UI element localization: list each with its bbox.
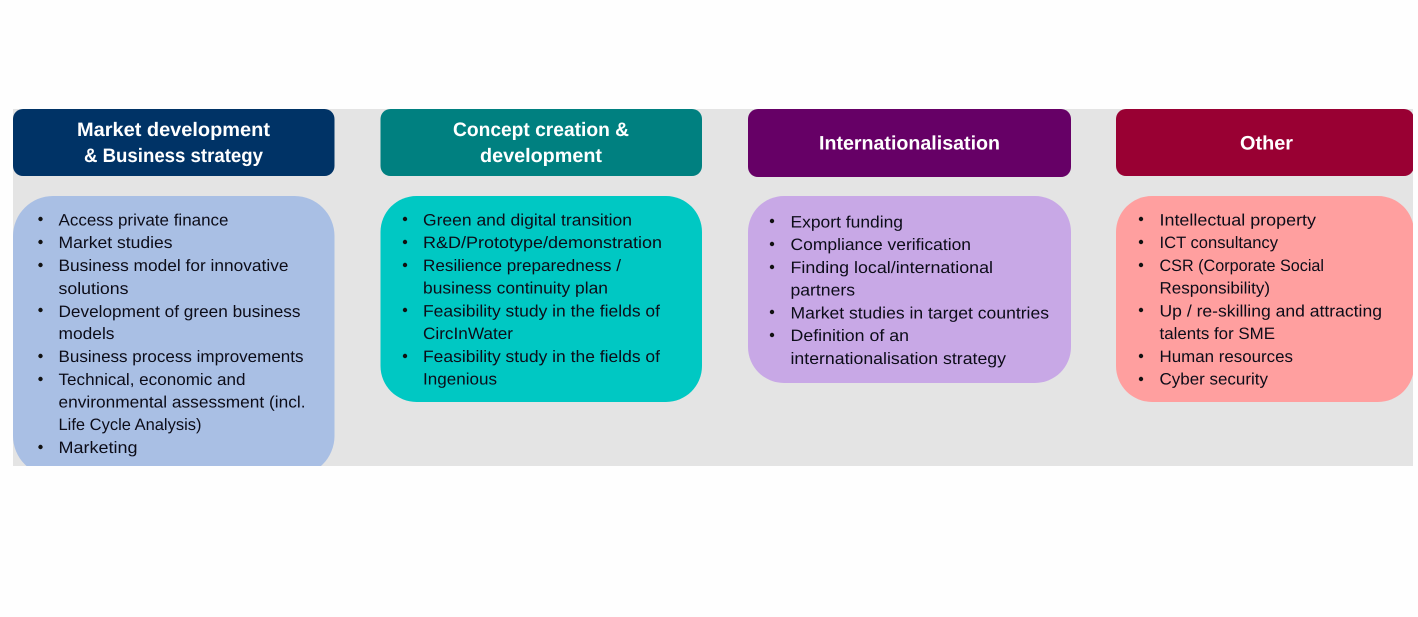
panel: concept creation list: Feasibility study in the fields of [423, 302, 660, 320]
column: concept creation [380, 109, 702, 402]
heading: other [1116, 109, 1414, 176]
panel: other list: Intellectual property [1160, 212, 1317, 230]
panel: concept creation list: Resilience preparedness / [423, 257, 621, 275]
heading: internationalisation [748, 109, 1071, 177]
panel: market development list: Access private finance [58, 212, 228, 230]
heading: market development: Market development [77, 119, 271, 141]
panel: other list: Cyber security [1160, 370, 1269, 388]
panel: concept creation list: Green and digital transition [423, 212, 632, 230]
panel: market development list: Life Cycle Analysis) [58, 416, 202, 434]
heading: concept creation: Concept creation & [453, 119, 629, 141]
panel: market development list [13, 196, 334, 476]
panel: market development list: Technical, economic and [58, 371, 245, 389]
panel: internationalisation list: Definition of an [790, 327, 909, 345]
panel: internationalisation list: Finding local/international [790, 259, 993, 277]
panel: concept creation list: business continuity plan [423, 280, 608, 298]
panel: concept creation list: R&D/Prototype/demonstration [423, 234, 662, 252]
panel: market development list: models [58, 325, 114, 343]
panel: concept creation list: CircInWater [423, 325, 514, 343]
panel: market development list: environmental assessment (incl. [58, 394, 306, 412]
heading: market development [13, 109, 334, 176]
heading: concept creation [380, 109, 702, 176]
panel: other list: ICT consultancy [1160, 234, 1279, 252]
panel: other list: Up / re-skilling and attracting [1160, 302, 1382, 320]
panel: market development list: solutions [58, 280, 128, 298]
panel: internationalisation list: Compliance verification [790, 236, 971, 254]
panel: internationalisation list: Market studies in target countries [790, 304, 1049, 322]
heading: internationalisation: Internationalisation [819, 132, 1000, 154]
panel: concept creation list: Feasibility study in the fields of [423, 348, 660, 366]
panel: market development list: Business model for innovative [58, 257, 288, 275]
background band [13, 109, 1413, 466]
panel: other list: talents for SME [1160, 325, 1275, 343]
panel: concept creation list: Ingenious [423, 370, 497, 388]
heading: other: Other [1240, 132, 1293, 154]
column: other [1116, 109, 1414, 402]
panel: other list [1116, 196, 1414, 402]
panel: market development list: Business process improvements [58, 348, 304, 366]
diagram columns [13, 109, 1414, 476]
heading: market development: & Business strategy [84, 145, 263, 167]
panel: internationalisation list: internationalisation strategy [790, 350, 1007, 368]
panel: internationalisation list: Export funding [790, 214, 903, 232]
panel: other list: Human resources [1160, 348, 1293, 366]
panel: concept creation list [380, 196, 702, 402]
panel: other list: Responsibility) [1160, 280, 1270, 298]
column: internationalisation [748, 109, 1071, 383]
panel: other list: CSR (Corporate Social [1160, 257, 1324, 275]
panel: internationalisation list [748, 196, 1071, 383]
heading: concept creation: development [480, 145, 603, 167]
column: market development [13, 109, 334, 476]
panel: market development list: Market studies [58, 234, 172, 252]
panel: market development list: Marketing [58, 439, 138, 457]
panel: internationalisation list: partners [790, 282, 855, 300]
panel: market development list: Development of green business [58, 303, 300, 321]
